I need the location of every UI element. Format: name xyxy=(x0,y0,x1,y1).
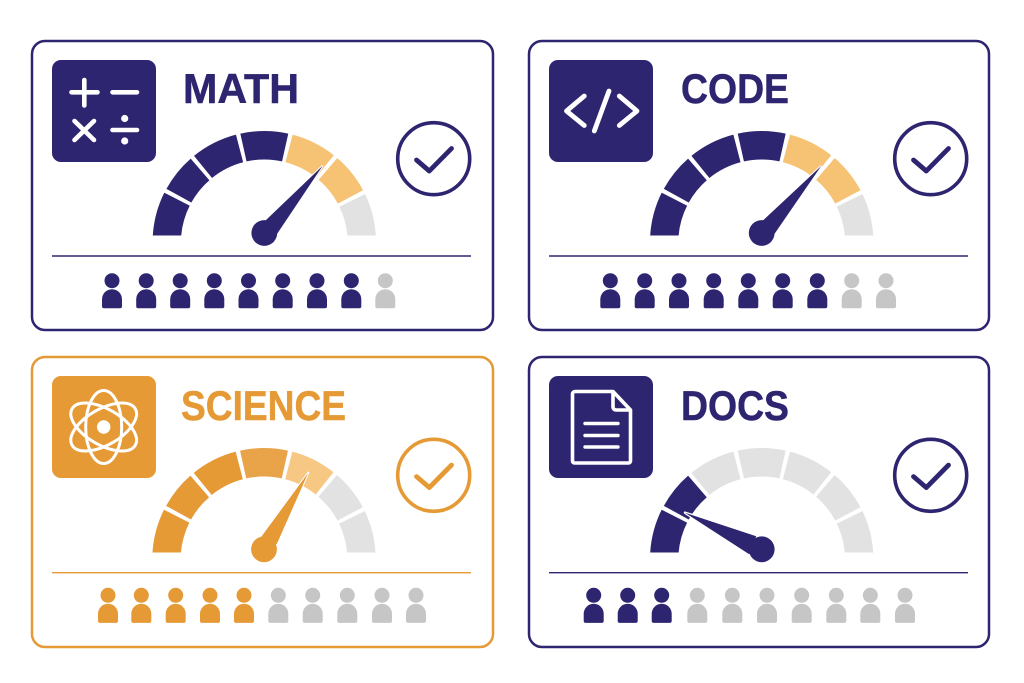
needle: docs xyxy=(685,513,775,562)
people row: 3 of 10 xyxy=(584,588,915,623)
people row: 7 of 9 xyxy=(600,273,896,308)
icon: atom xyxy=(52,376,156,478)
icon: check badge xyxy=(398,439,470,511)
gauge: docs xyxy=(650,448,874,562)
gauge: math xyxy=(152,131,376,246)
panel: science xyxy=(32,357,493,647)
heading: code: CODE xyxy=(681,65,789,112)
panel: docs xyxy=(529,357,989,647)
people row: 5 of 10 xyxy=(98,588,426,623)
gauge: science xyxy=(152,448,376,562)
icon: code brackets xyxy=(549,60,653,162)
panel: code xyxy=(529,41,989,330)
icon: document xyxy=(549,376,653,478)
heading: docs: DOCS xyxy=(681,382,789,429)
needle: code xyxy=(749,166,821,246)
icon: check badge xyxy=(398,123,470,195)
needle: science xyxy=(251,473,308,562)
people row: 8 of 9 xyxy=(102,273,395,308)
gauge: code xyxy=(650,131,874,246)
heading: math: MATH xyxy=(183,65,299,112)
needle: math xyxy=(251,166,323,246)
icon: check badge xyxy=(895,123,967,195)
icon: check badge xyxy=(895,439,967,511)
icon: math operators xyxy=(52,60,156,162)
panel: math xyxy=(32,41,493,330)
heading: science: SCIENCE xyxy=(181,382,346,429)
